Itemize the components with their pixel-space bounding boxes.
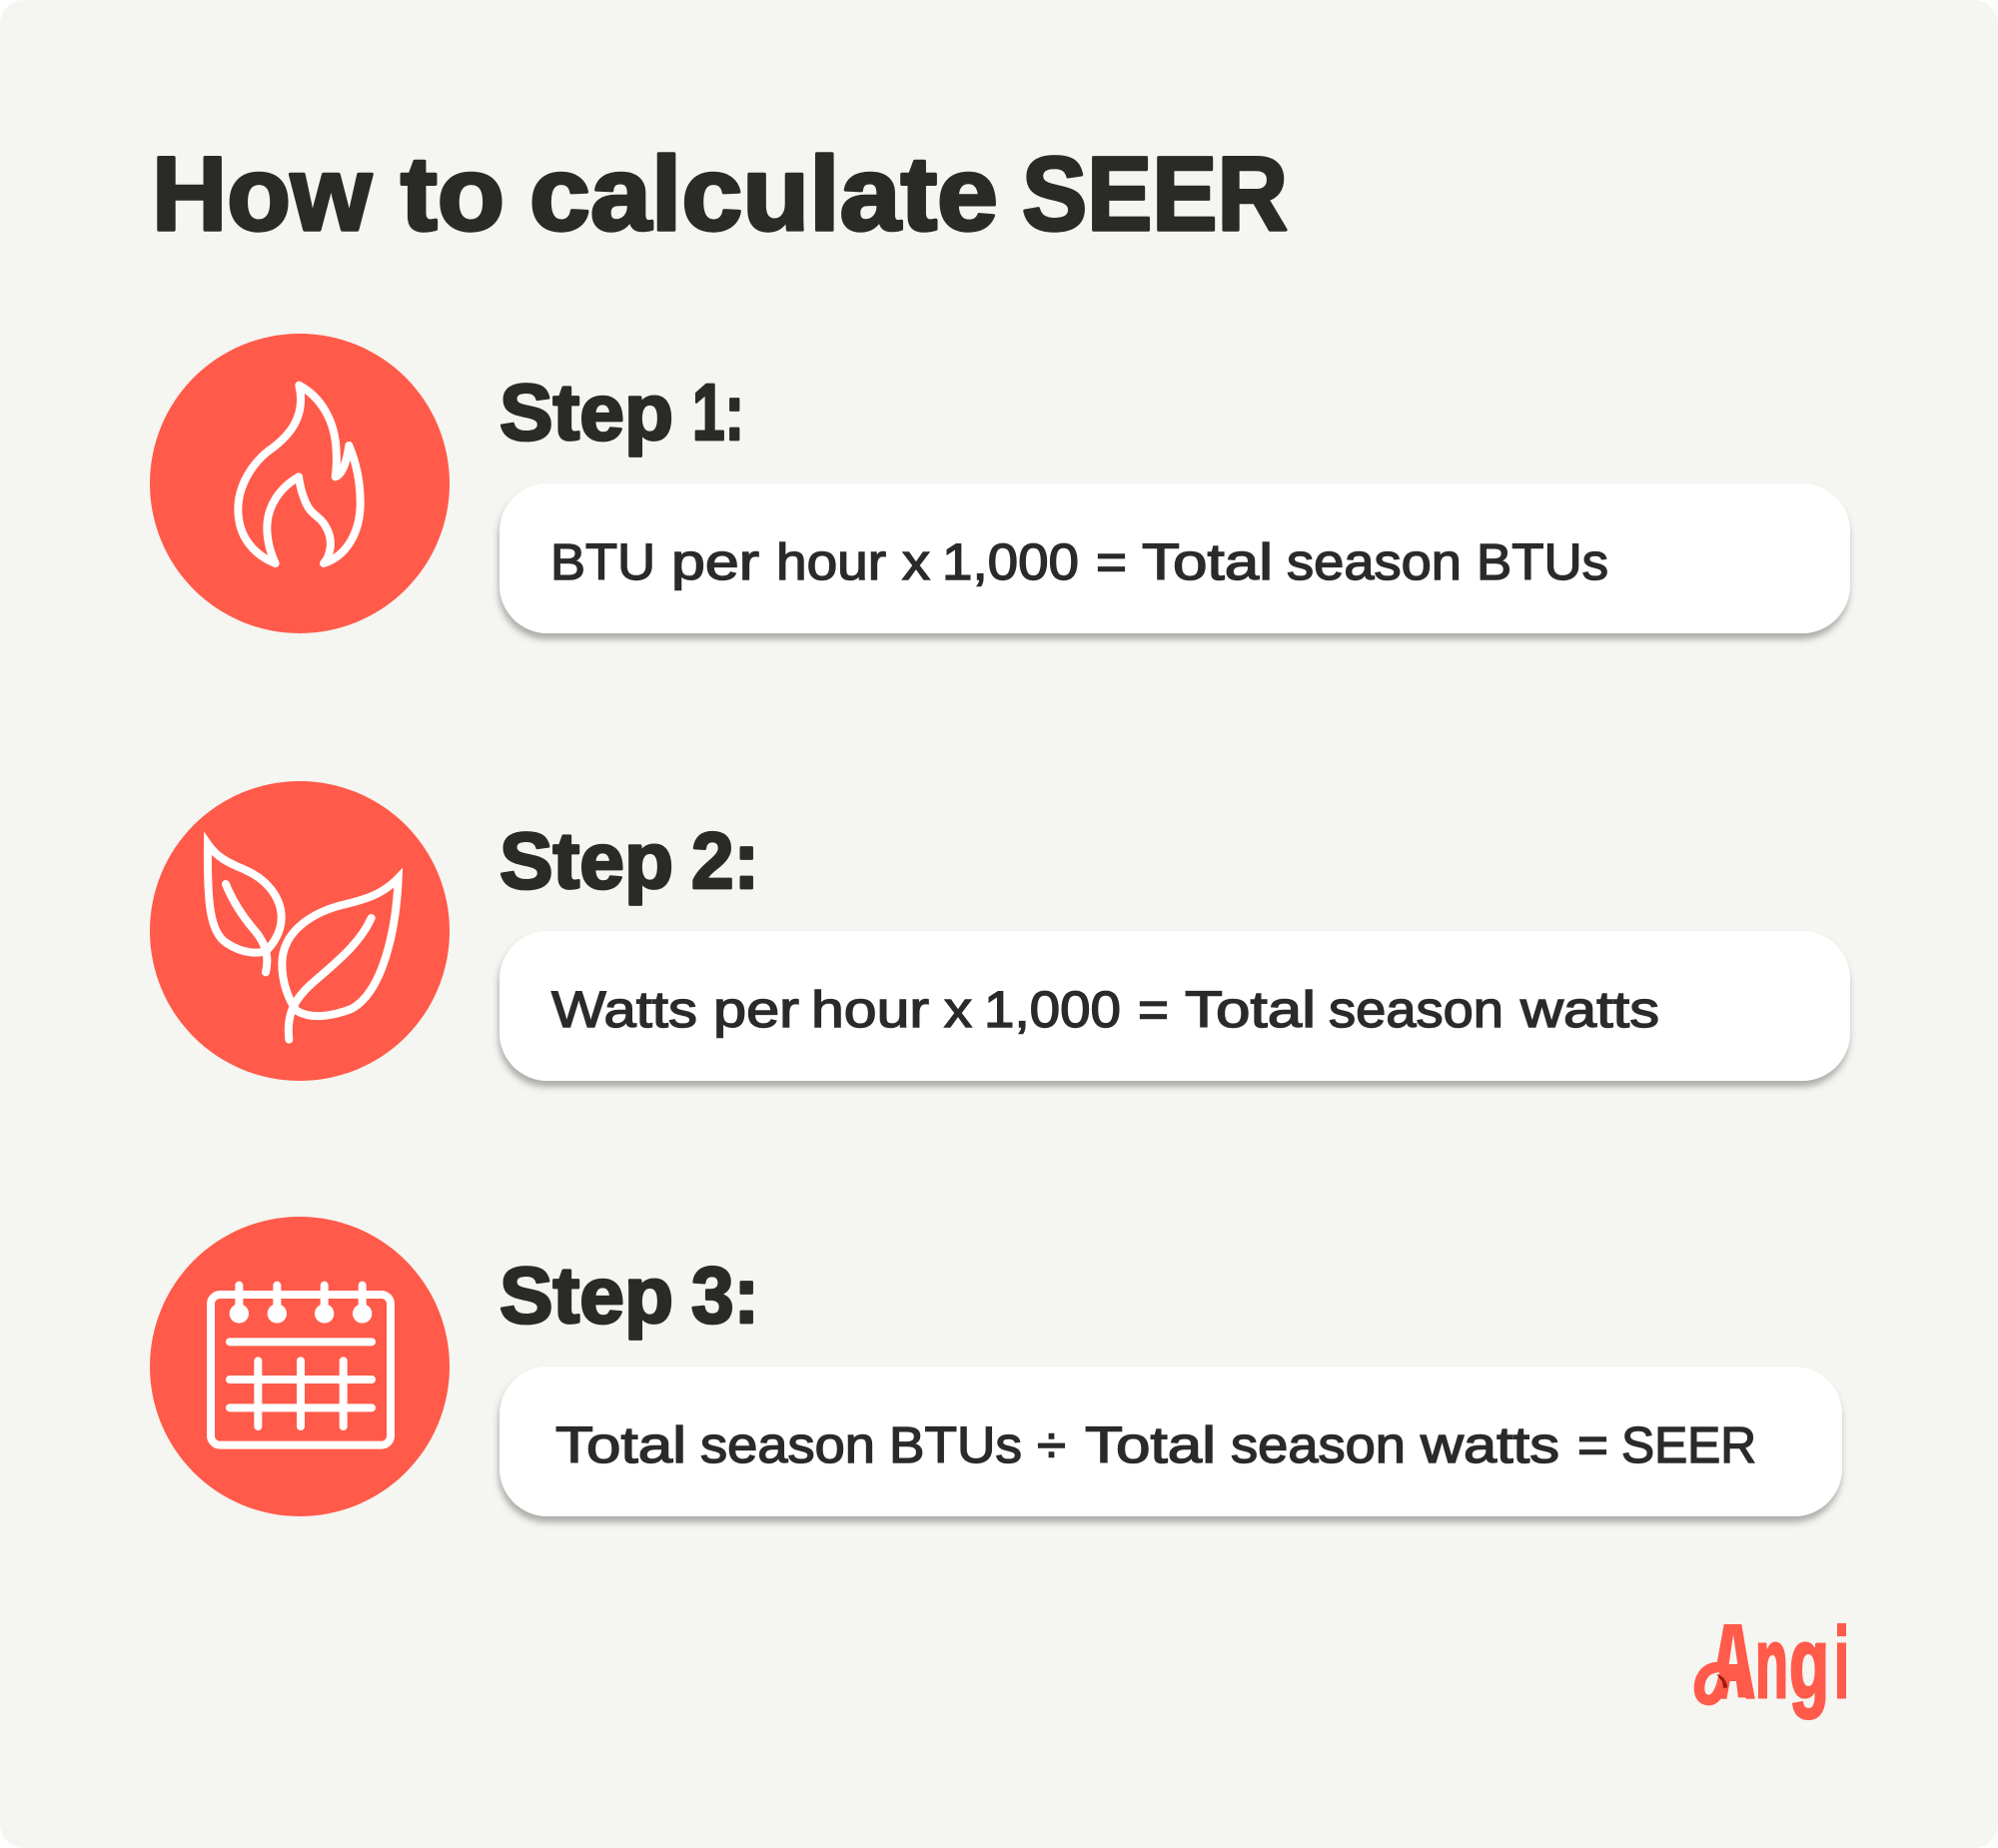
step 2 heading: Step [500,816,673,905]
icon: flame [150,334,450,633]
step 3 formula card: BTUs [889,1416,1022,1473]
title: calculate [529,136,998,253]
step 3 formula card: watts [1420,1416,1559,1473]
step 1 formula card: x [902,533,930,590]
step 1 formula card: season [1287,533,1462,590]
logo: Angi: g [1789,1607,1829,1719]
step 2 formula card [500,931,1850,1081]
step 1 formula card: BTU [550,533,655,590]
step 3 formula card: Total [555,1416,686,1473]
step 2 formula card: x [944,981,972,1038]
step 3 heading [500,1251,759,1340]
step 3 formula card [500,1367,1842,1516]
step 3 panel [150,1217,1842,1516]
step 2 formula card: Watts [551,981,697,1038]
step 2 formula card: Total [1185,981,1316,1038]
step 1 formula card: hour [776,533,886,590]
step 2 heading [500,816,759,905]
step 1 heading: 1: [692,368,744,457]
step 2 formula card: hour [811,981,929,1038]
step 3 formula card: Total [1085,1416,1216,1473]
step 1 formula card [500,483,1850,633]
title: SEER [1022,136,1288,253]
logo: Angi: i [1834,1607,1849,1719]
step 3 heading: 3: [691,1251,759,1340]
logo: Angi [1699,1607,1849,1719]
logo: Angi: n [1755,1607,1788,1719]
logo: Angi: A [1717,1607,1755,1719]
step 2 formula card: = [1138,981,1169,1038]
step 3 formula card: season [700,1416,875,1473]
step 3 formula card: ÷ [1037,1416,1066,1473]
step 3 formula card: = [1577,1416,1608,1473]
title: to [401,136,504,253]
step 2 formula card: watts [1519,981,1659,1038]
step 2 formula card: 1,000 [984,981,1121,1038]
step 3 heading: Step [500,1251,673,1340]
icon: leaves [150,781,450,1081]
step 1 formula card: 1,000 [942,533,1079,590]
step 3 formula card: SEER [1621,1416,1756,1473]
step 3 formula card: season [1231,1416,1406,1473]
step 1 panel [150,334,1850,633]
step 1 formula card: Total [1142,533,1273,590]
step 2 formula card: per [713,981,799,1038]
step 2 panel [150,781,1850,1081]
step 1 formula card: = [1096,533,1127,590]
step 2 formula card: season [1329,981,1503,1038]
step 2 heading: 2: [691,816,759,905]
icon: calendar [150,1217,450,1516]
step 1 heading: Step [500,368,673,457]
step 1 formula card: per [671,533,759,590]
title: How [152,136,372,253]
step 1 formula card: BTUs [1477,533,1608,590]
title [152,136,1288,253]
